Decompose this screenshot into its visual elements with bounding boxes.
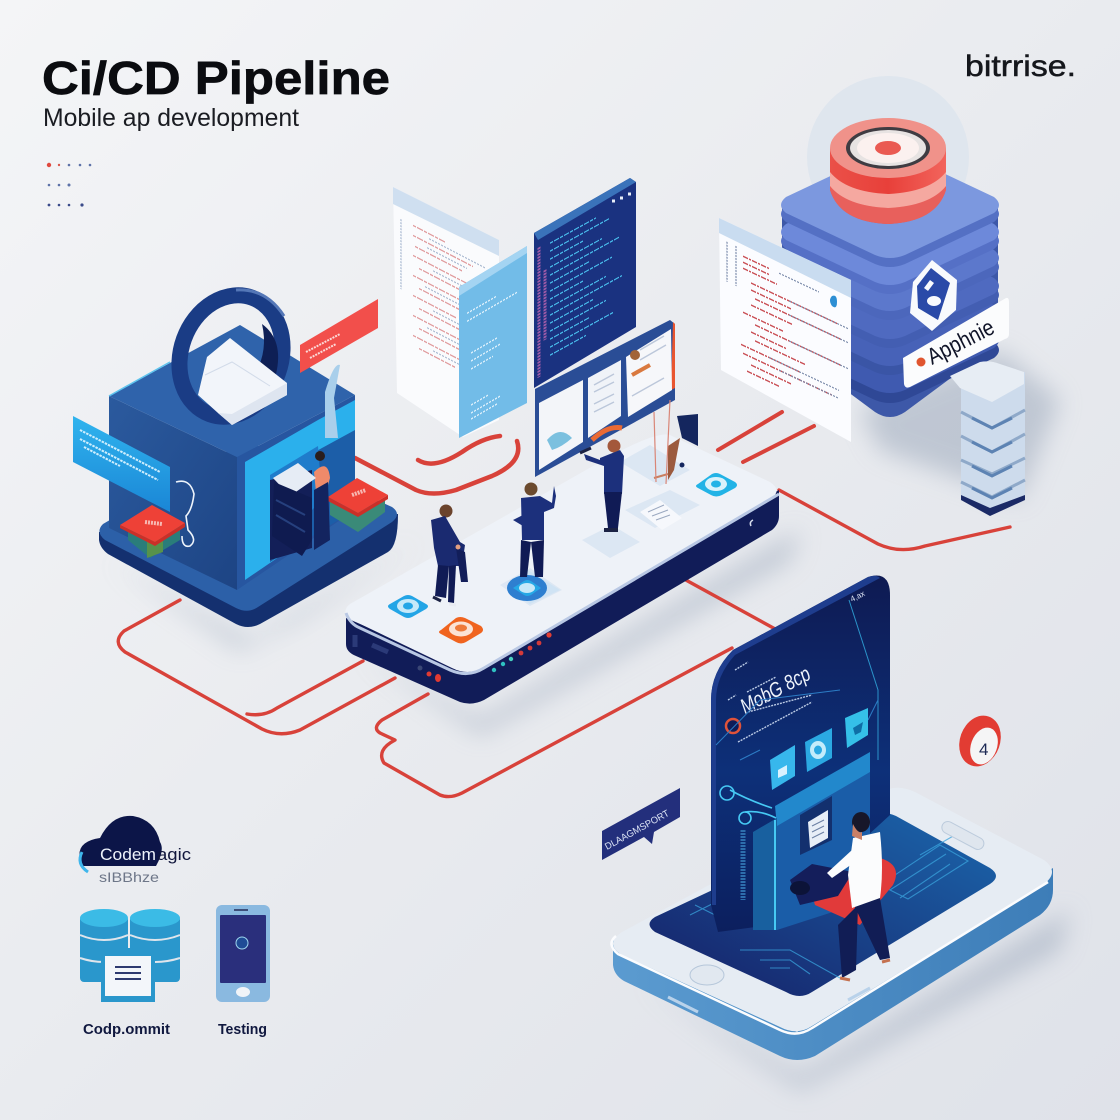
server tower [950,361,1025,516]
code panel right [719,218,851,442]
home button [690,965,724,985]
app label: Apphnie [922,314,998,369]
app label [903,298,1009,388]
speaker slot [940,819,986,852]
top edge highlight [109,362,170,396]
platform lit edge [346,494,779,674]
connector wires [118,412,1010,797]
red button [830,118,946,224]
app icon cyan center [507,570,560,604]
base plate [99,443,398,627]
status text: 4,ax [849,589,866,604]
app icon cyan right [696,473,737,496]
platform side [346,490,779,704]
red stool right [328,478,388,532]
red stool left [120,505,185,558]
halo [807,76,969,238]
floor tiles [500,445,700,606]
subtitle: Mobile ap development [43,104,299,132]
small dashboard panel [535,320,675,477]
phone screen [650,813,996,996]
soft ground shadows [110,350,1070,1090]
kiosk box [753,752,870,930]
icon: phone testing [216,905,270,1002]
decorative dot grid [47,163,91,207]
cube right face with cut-out [237,395,355,590]
bottom phone base [611,788,1053,1060]
phone title: MobG 8cp [737,662,814,718]
circuit line [849,600,878,760]
panel outlines [716,690,878,760]
title: Ci/CD Pipeline [42,52,390,104]
engineer at kiosk [790,812,896,980]
left build cube [73,281,398,627]
logo: bitrrise: bitrrise. [965,50,1076,83]
phone top [613,788,1052,1031]
label: code commit: Codp.ommit [83,1022,170,1038]
circuit traces [690,835,968,978]
speech bubble label: DLAAGMSPORT [603,808,672,853]
stack layers [781,161,999,403]
logo: Codemagic cloud: Codem [100,845,156,864]
blue label [73,416,170,512]
person four with navy seat [654,400,698,484]
round badge 4: 4 [979,740,988,759]
document sheet [640,500,682,530]
hanging tool [325,365,340,438]
tall phone [711,575,890,932]
side ports [355,520,753,682]
round badge 4 [952,710,1008,772]
code panel light blue [459,246,527,438]
red flag [300,299,378,373]
platform top [345,434,777,672]
icon: code commit database [80,909,180,1002]
central platform [345,434,779,704]
app icon orange [439,617,483,644]
app icon cyan left [388,595,428,618]
speech bubble label [602,788,680,860]
garbled caption: sIBBhze [99,869,159,885]
white key outline [176,481,194,546]
logo: Codemagic cloud: agic [157,845,192,864]
white block [198,338,287,425]
person two [513,482,556,577]
cube left face [109,396,237,590]
technician [272,451,330,556]
side buttons [668,988,870,1012]
database stack with red button [781,76,1009,417]
app tile 1 [770,745,795,790]
person three [580,428,624,530]
logo: Codemagic cloud [79,816,192,872]
phone side [613,868,1053,1060]
app tile 3 [845,708,868,748]
ring [163,281,299,431]
phone title badge [726,719,740,733]
top slab [781,152,999,258]
stack body [782,205,998,417]
person one [431,504,468,605]
code panel navy [534,178,636,388]
shield logo [910,260,957,331]
label: testing: Testing [218,1022,267,1038]
cube top face [109,325,355,457]
code panel left [393,187,499,437]
app tile 2 [805,728,832,772]
glowing connectors [720,786,776,900]
